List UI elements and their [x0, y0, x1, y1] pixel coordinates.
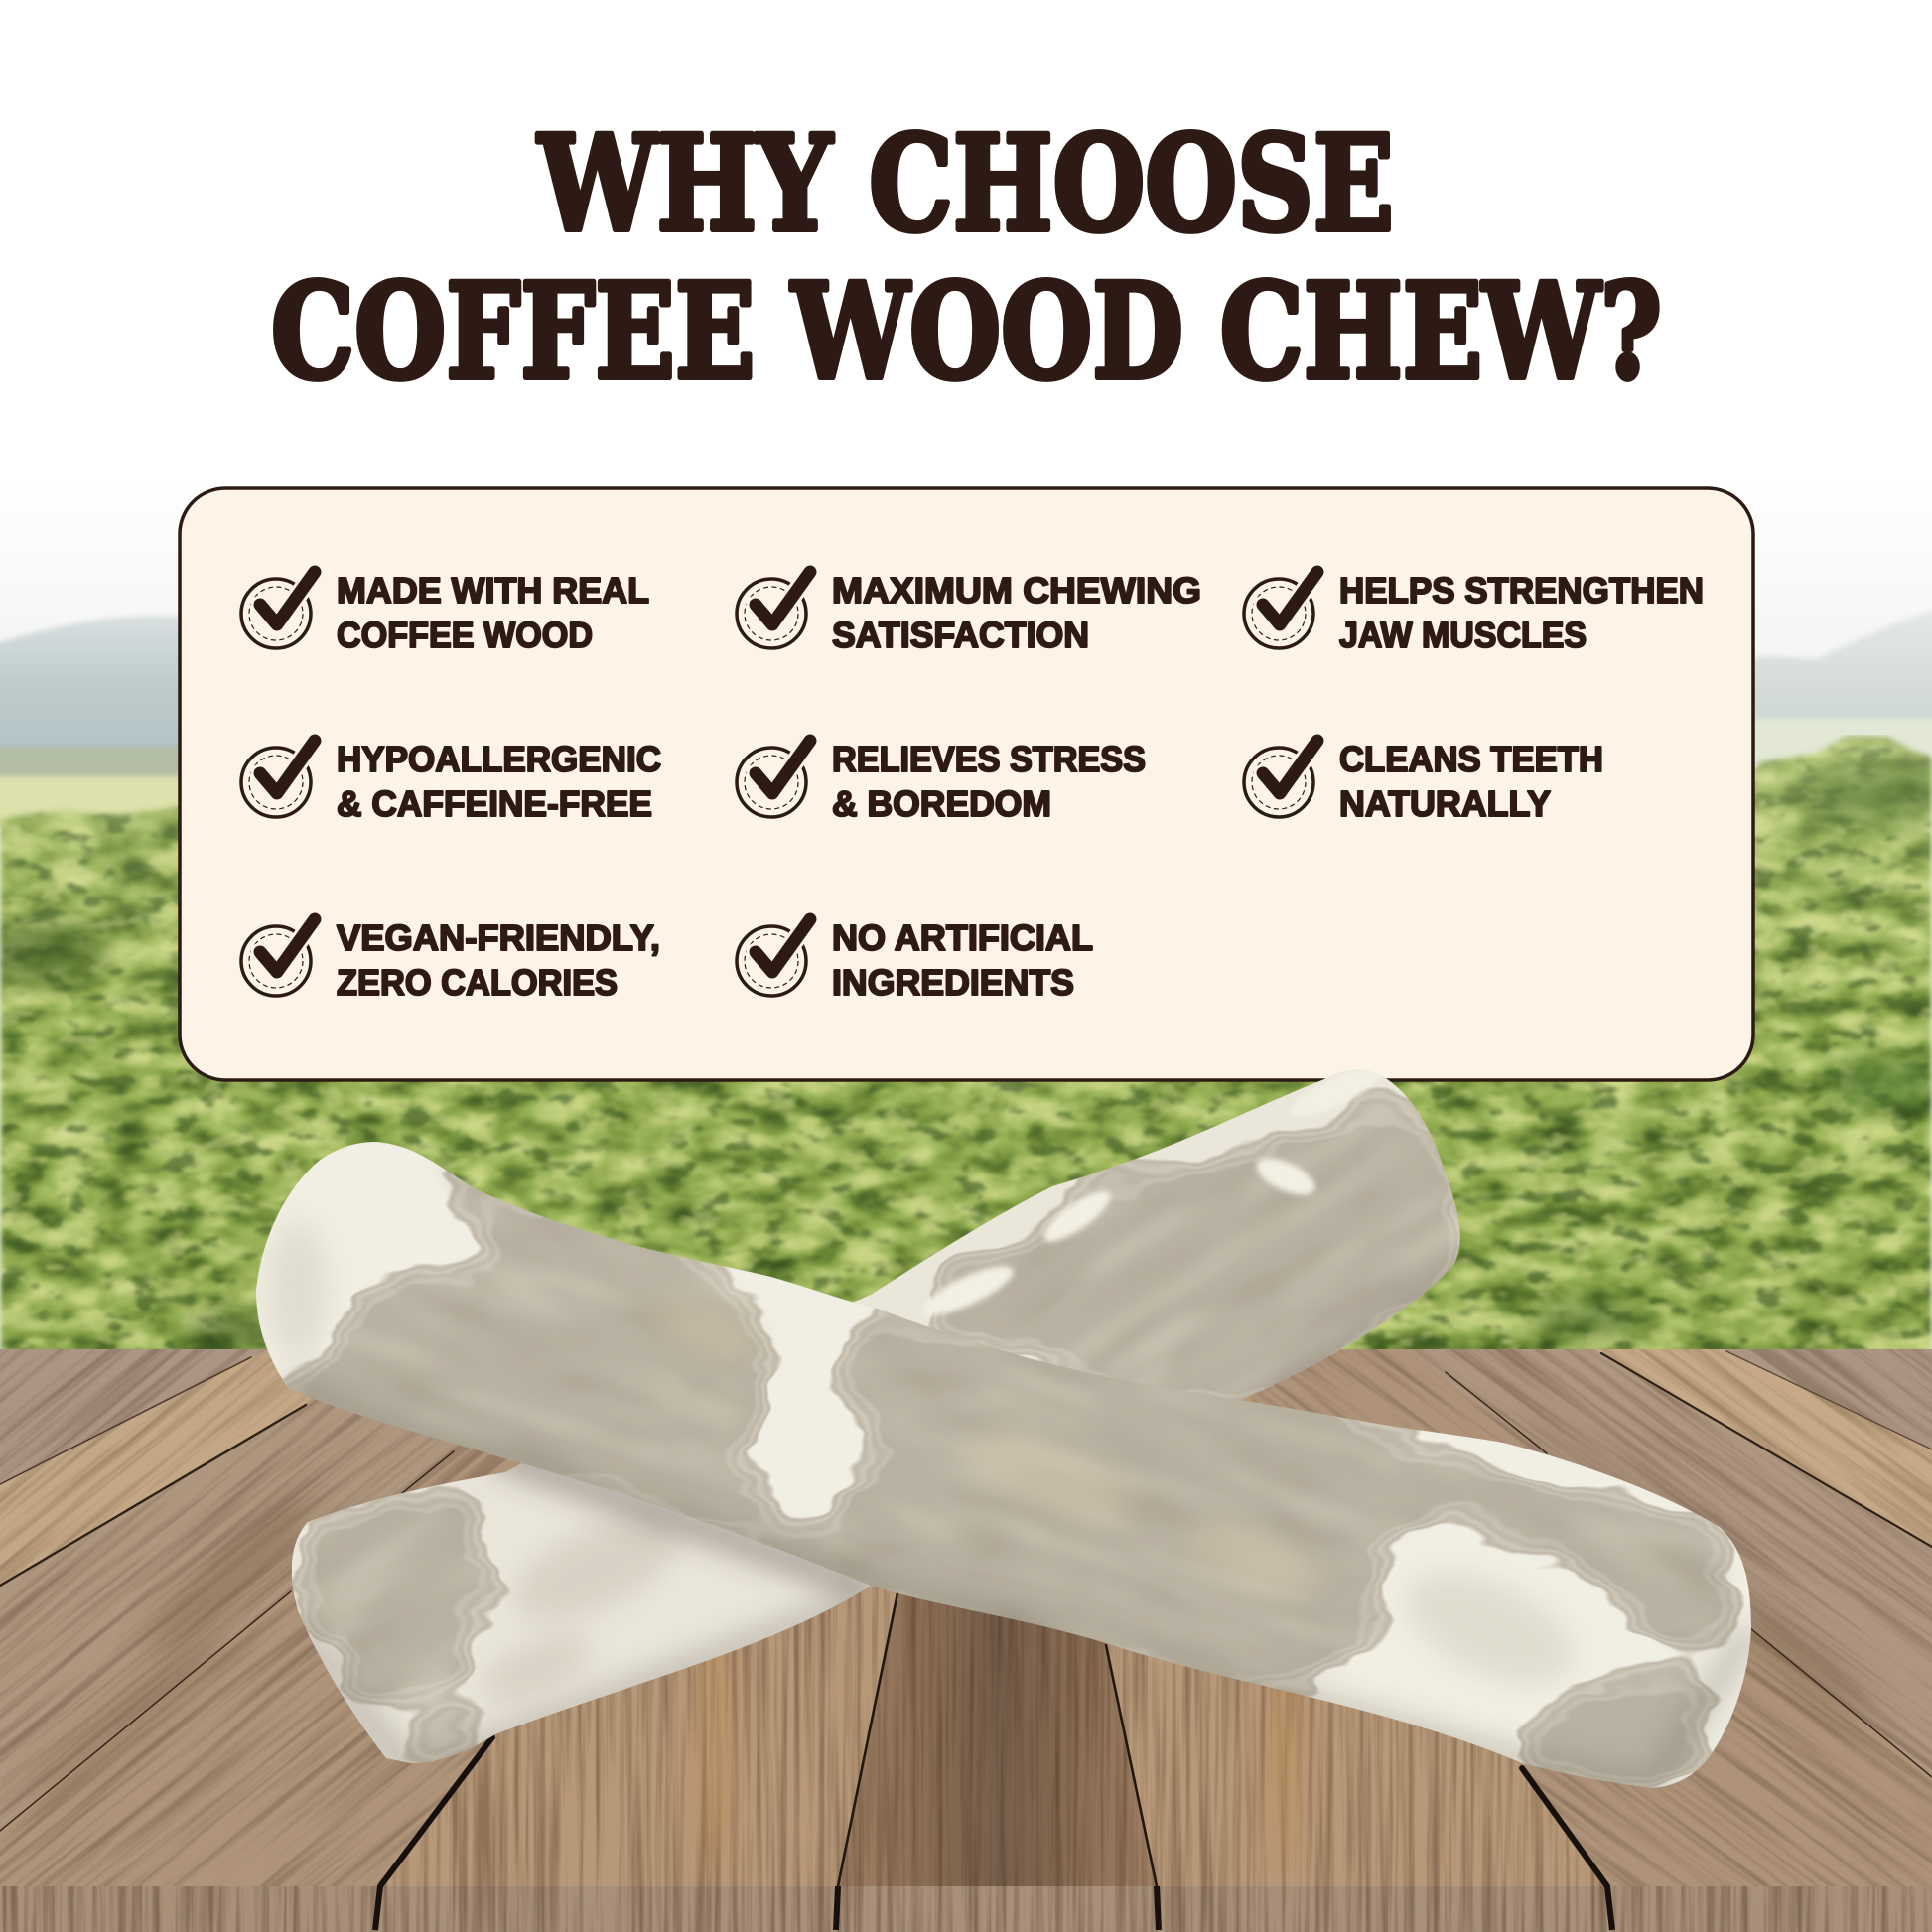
- benefit: helps strengthen jaw muscles: HELPS STRENGTHEN: [1339, 570, 1704, 611]
- plank colour streaks: [16, 1394, 1886, 1876]
- benefit: maximum chewing satisfaction: MAXIMUM CHEWING: [832, 570, 1201, 611]
- benefit: vegan-friendly, zero calories: [241, 917, 660, 1003]
- pale patches on back log: [925, 1071, 1376, 1318]
- background: sky, mountains and coffee field: [0, 604, 1932, 1349]
- shading on back log: [298, 1261, 1459, 1777]
- benefit: vegan-friendly, zero calories: VEGAN-FRIENDLY,: [337, 917, 660, 958]
- benefit: made with real coffee wood: MADE WITH REAL: [337, 570, 649, 611]
- shading on front log: [288, 1388, 1751, 1788]
- panel background: [180, 488, 1753, 1080]
- marble streaks on back log: [324, 1163, 1457, 1693]
- benefit: cleans teeth naturally: NATURALLY: [1339, 783, 1551, 824]
- misty sky: [0, 0, 1932, 794]
- benefit: no artificial ingredients: NO ARTIFICIAL: [832, 917, 1093, 958]
- benefit: made with real coffee wood: COFFEE WOOD: [337, 615, 593, 655]
- benefit: relieves stress and boredom: RELIEVES STRESS: [832, 739, 1146, 779]
- planks: [0, 1349, 1932, 1886]
- plank seams: [0, 1351, 1932, 1886]
- distant tree line and pale meadow: [0, 719, 1932, 826]
- benefit: maximum chewing satisfaction: SATISFACTION: [832, 615, 1089, 655]
- benefit: relieves stress and boredom: [737, 739, 1146, 824]
- soft shading on pale wood: [483, 1517, 679, 1706]
- benefit: vegan-friendly, zero calories: ZERO CALORIES: [337, 962, 618, 1003]
- soft shading on pale ends: [268, 1221, 1589, 1707]
- wooden table top with perspective planks: [0, 1349, 1932, 1932]
- benefit: relieves stress and boredom: & BOREDOM: [832, 783, 1051, 824]
- marble streaks on front log: [353, 1174, 1729, 1657]
- benefit: hypoallergenic and caffeine-free: HYPOALLERGENIC: [337, 739, 661, 779]
- warm mottling on front log: [646, 1292, 1324, 1604]
- product: back coffee wood chew: [278, 1052, 1479, 1777]
- panel: benefits checklist: [180, 488, 1753, 1080]
- benefit: maximum chewing satisfaction: [737, 570, 1201, 655]
- benefit: cleans teeth naturally: CLEANS TEETH: [1339, 739, 1603, 779]
- distant mountains: [0, 608, 1932, 755]
- wood grain: [0, 1349, 1932, 1932]
- benefit: helps strengthen jaw muscles: [1244, 570, 1704, 655]
- benefit: cleans teeth naturally: [1244, 739, 1603, 824]
- table front edge: [0, 1886, 1932, 1932]
- benefit: hypoallergenic and caffeine-free: & CAFFEINE-FREE: [337, 783, 652, 824]
- benefit: no artificial ingredients: [737, 917, 1093, 1003]
- benefit: hypoallergenic and caffeine-free: [241, 739, 661, 824]
- title: WHY CHOOSE: [536, 107, 1394, 261]
- benefit: no artificial ingredients: INGREDIENTS: [832, 962, 1074, 1003]
- product: front coffee wood chew: [248, 1132, 1757, 1797]
- coffee plantation foliage: [0, 735, 1932, 1352]
- benefit: made with real coffee wood: [241, 570, 649, 655]
- title: [271, 107, 1662, 409]
- benefit: helps strengthen jaw muscles: JAW MUSCLES: [1339, 615, 1587, 655]
